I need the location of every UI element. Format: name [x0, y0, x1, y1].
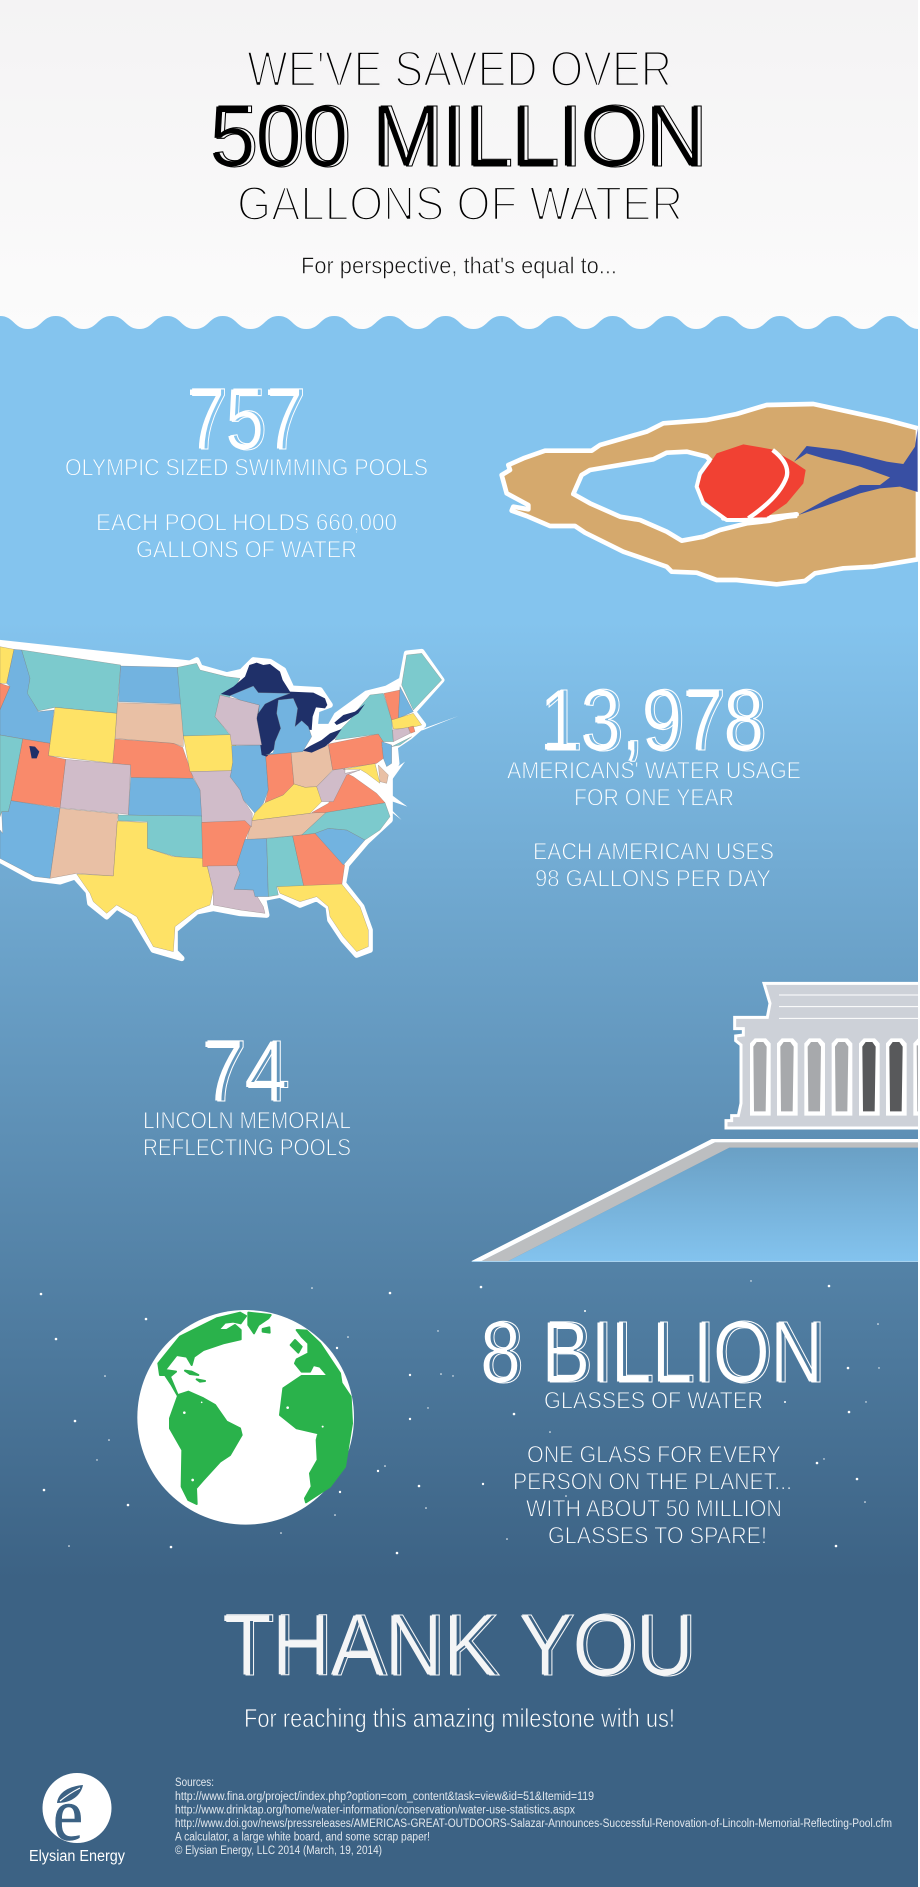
- states: [0, 647, 442, 952]
- logo leaf: [57, 1785, 83, 1803]
- stat label line 2: REFLECTING POOLS: [143, 1134, 351, 1162]
- stat number 8 billion: 8 BILLION: [480, 1304, 823, 1401]
- copyright: © Elysian Energy, LLC 2014 (March, 19, 2014): [175, 1845, 382, 1857]
- detail line 4: GLASSES TO SPARE!: [548, 1522, 767, 1550]
- stat number 8 billion: 8 BILLION: [483, 1304, 826, 1401]
- sources heading: Sources:: [175, 1777, 214, 1789]
- icon: earth globe: [137, 1310, 354, 1525]
- decoration: stars: [40, 1280, 880, 1554]
- title line 3: GALLONS OF WATER: [237, 178, 683, 231]
- detail line 1: ONE GLASS FOR EVERY: [527, 1442, 781, 1468]
- icon: swimmer: [502, 404, 918, 584]
- map outline: [0, 642, 442, 958]
- panel: US map: [0, 642, 458, 967]
- thank you heading: THANK YOU: [222, 1597, 694, 1694]
- tan hand patch: [763, 518, 800, 530]
- stat label line 2: FOR ONE YEAR: [574, 784, 734, 812]
- title big number: 500 MILLION: [212, 88, 708, 185]
- source 2: http://www.drinktap.org/home/water-information/conservation/water-use-statistics.aspx: [175, 1804, 575, 1816]
- title line 1: WE'VE SAVED OVER: [247, 41, 672, 97]
- coastal spikes: [172, 716, 458, 967]
- columns: [750, 1038, 920, 1116]
- sources text block: [175, 1777, 892, 1857]
- logo: Elysian Energy: [29, 1773, 125, 1865]
- stat label line 1: LINCOLN MEMORIAL: [143, 1108, 351, 1134]
- panel: swimming pools stat: [65, 371, 428, 564]
- stat number 757: 757: [189, 371, 306, 468]
- stat number 13,978: 13,978: [539, 672, 764, 769]
- stat detail line 1: EACH AMERICAN USES: [533, 838, 774, 866]
- stat number 74: 74: [201, 1023, 287, 1120]
- continents: [158, 1313, 352, 1504]
- stars over globe: [183, 1401, 324, 1481]
- stat label: GLASSES OF WATER: [544, 1388, 763, 1414]
- thank you subtitle: For reaching this amazing milestone with us!: [244, 1703, 675, 1733]
- Wisconsin and Michigan over the lakes: [215, 686, 312, 755]
- subtitle: For perspective, that's equal to...: [301, 252, 617, 278]
- swimsuit: [794, 428, 918, 515]
- logo name: Elysian Energy: [29, 1848, 125, 1865]
- detail line 3: WITH ABOUT 50 MILLION: [526, 1496, 782, 1522]
- water gap between arms: [573, 452, 797, 541]
- reflecting pool: [508, 1148, 920, 1261]
- stat number 13,978: 13,978: [542, 672, 767, 769]
- stat detail line 2: GALLONS OF WATER: [136, 536, 357, 564]
- logo disc: [42, 1773, 112, 1843]
- logo letter: e: [53, 1773, 83, 1857]
- source 4: A calculator, a large white board, and some scrap paper!: [175, 1832, 430, 1844]
- globe disc: [137, 1310, 354, 1525]
- stat detail line 1: EACH POOL HOLDS 660,000: [96, 510, 397, 536]
- panel: Lincoln Memorial stat: [143, 1023, 351, 1162]
- panel: Americans water usage stat: [507, 672, 801, 892]
- great lakes: [29, 663, 365, 758]
- swimmer arms and body: [502, 404, 918, 584]
- icon: Lincoln Memorial and reflecting pool: [472, 983, 920, 1262]
- source 1: http://www.fina.org/project/index.php?option=com_content&task=view&id=51&Itemid=119: [175, 1791, 594, 1803]
- stat label: OLYMPIC SIZED SWIMMING POOLS: [65, 454, 428, 482]
- panel: glasses of water stat: [480, 1304, 826, 1550]
- title big number: 500 MILLION: [209, 88, 705, 185]
- stat number 74: 74: [204, 1023, 290, 1120]
- title block: [209, 41, 708, 278]
- stat detail line 2: 98 GALLONS PER DAY: [535, 866, 771, 892]
- detail line 2: PERSON ON THE PLANET...: [513, 1468, 792, 1496]
- memorial building: [726, 983, 920, 1128]
- swim cap: [698, 444, 806, 518]
- stat label line 1: AMERICANS' WATER USAGE: [507, 758, 801, 784]
- stat number 757: 757: [186, 371, 303, 468]
- thank you heading: THANK YOU: [225, 1597, 697, 1694]
